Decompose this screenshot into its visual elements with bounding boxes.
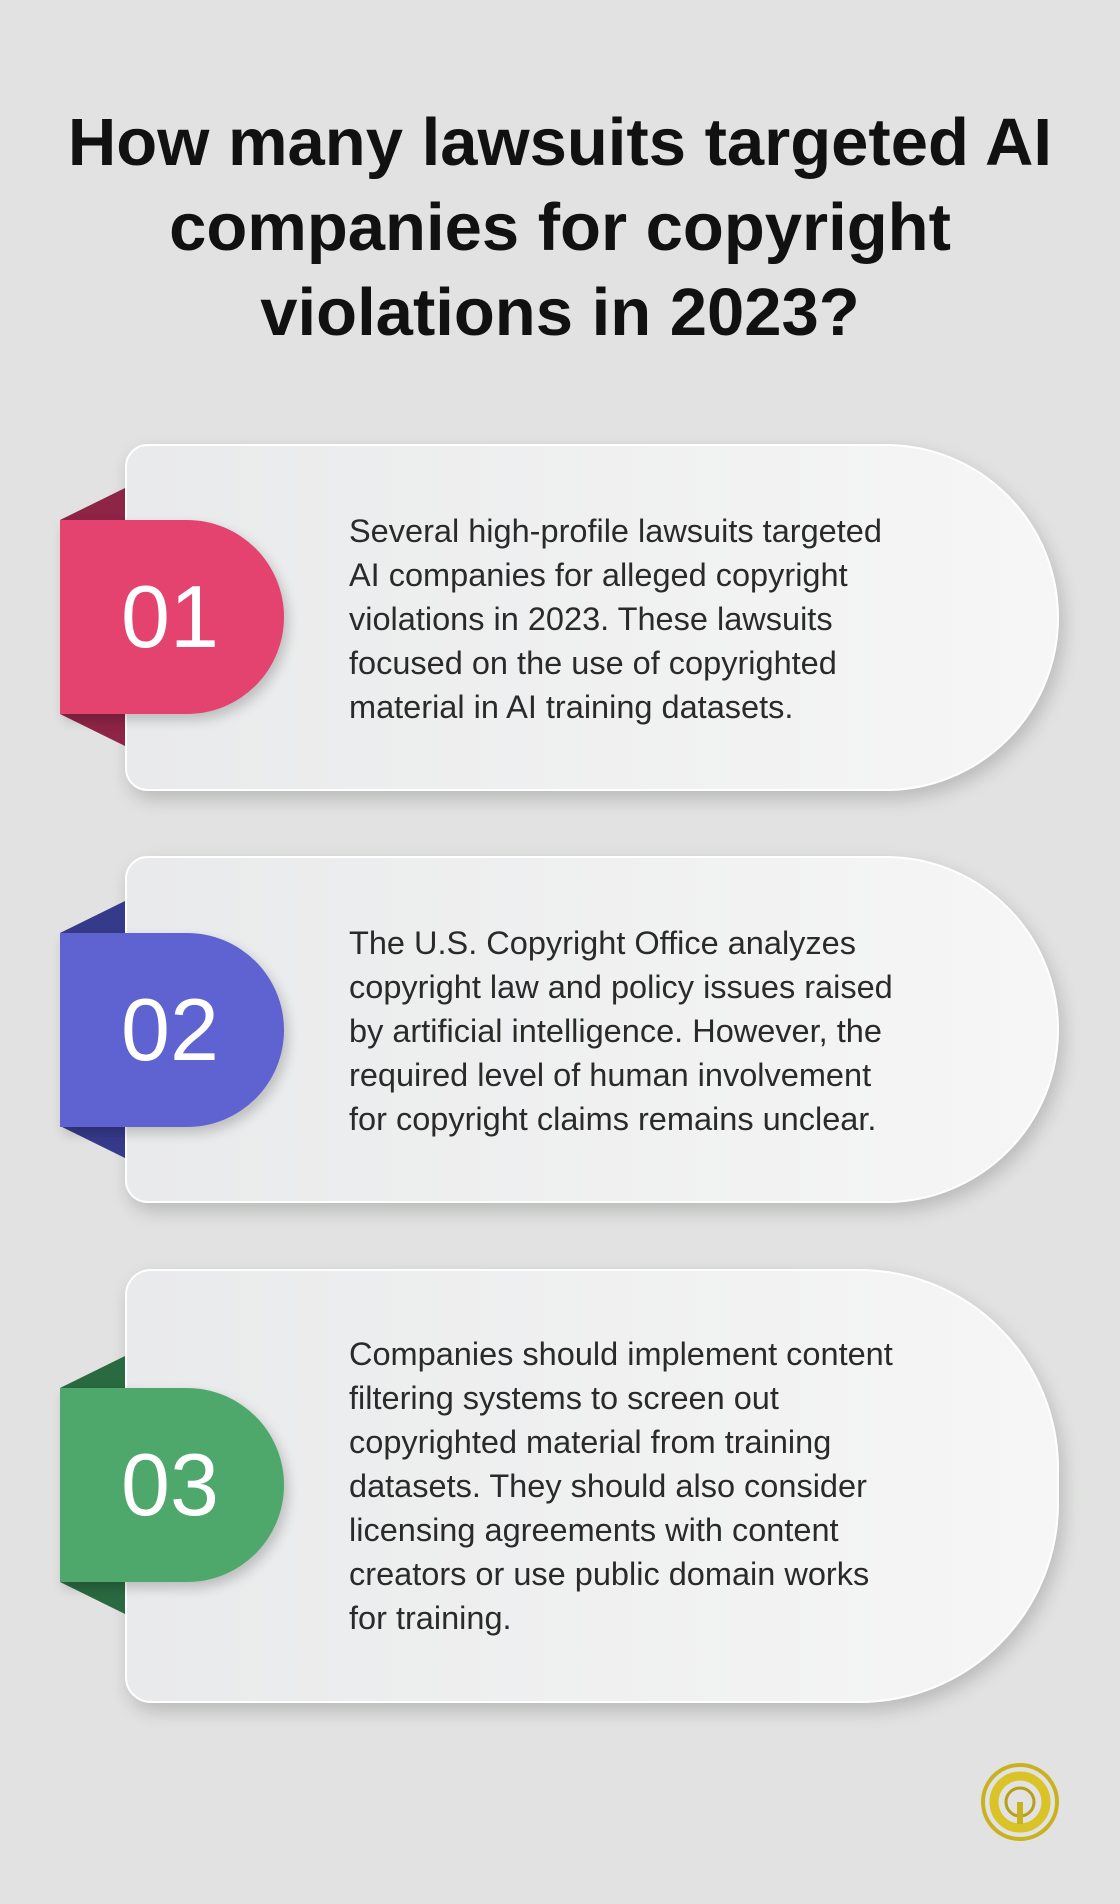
text: card 2: for copyright claims remains unclear. xyxy=(349,1101,876,1137)
title: How many lawsuits targeted AI xyxy=(68,105,1052,180)
fold: card 2 xyxy=(60,901,125,1158)
text: card 3: filtering systems to screen out xyxy=(349,1380,779,1416)
text: card 3: creators or use public domain works xyxy=(349,1556,869,1592)
icon: logo xyxy=(981,1763,1059,1841)
text: card 1: Several high-profile lawsuits targeted xyxy=(349,513,882,549)
badge: 02: 02 xyxy=(121,980,219,1079)
text: card 1: focused on the use of copyrighted xyxy=(349,645,837,681)
text: card 3: copyrighted material from training xyxy=(349,1424,831,1460)
text: card 2: required level of human involvement xyxy=(349,1057,871,1093)
panel: card 2 xyxy=(125,856,1059,1203)
badge: 02 xyxy=(60,933,284,1127)
title: companies for copyright xyxy=(169,190,951,265)
text: card 1 xyxy=(349,513,882,725)
badge: 01: 01 xyxy=(121,567,219,666)
title xyxy=(68,105,1052,350)
text: card 1: AI companies for alleged copyright xyxy=(349,557,848,593)
text: card 2 xyxy=(349,925,893,1137)
text: card 3: datasets. They should also consider xyxy=(349,1468,867,1504)
text: card 3 xyxy=(349,1336,893,1636)
text: card 1: violations in 2023. These lawsuits xyxy=(349,601,833,637)
text: card 2: by artificial intelligence. However, the xyxy=(349,1013,882,1049)
text: card 2: The U.S. Copyright Office analyzes xyxy=(349,925,856,961)
panel: card 3 xyxy=(125,1269,1059,1703)
fold: card 1 xyxy=(60,488,125,746)
text: card 1: material in AI training datasets. xyxy=(349,689,793,725)
badge: 01 xyxy=(60,520,284,714)
badge: 03: 03 xyxy=(121,1435,219,1534)
text: card 3: for training. xyxy=(349,1600,512,1636)
text: card 3: licensing agreements with content xyxy=(349,1512,839,1548)
fold: card 3 xyxy=(60,1356,125,1614)
badge: 03 xyxy=(60,1388,284,1582)
text: card 2: copyright law and policy issues raised xyxy=(349,969,893,1005)
title: violations in 2023? xyxy=(260,275,860,350)
panel: card 1 xyxy=(125,444,1059,791)
text: card 3: Companies should implement content xyxy=(349,1336,893,1372)
